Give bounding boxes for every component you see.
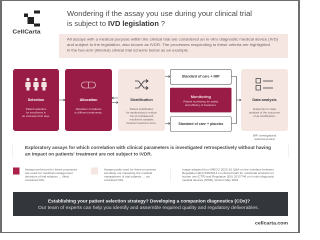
box: standard of care + placebo [170, 116, 231, 132]
box: monitoring: Patient monitoring for safety [183, 99, 219, 103]
source note: Image adapted from MDCG 2022-10 Q&A on the interface between [182, 167, 274, 171]
card: stratification: risk of (im)balanced [130, 114, 154, 118]
card: stratification: Patient stratification [130, 107, 154, 111]
card: allocation: Allocation [80, 98, 98, 102]
box: monitoring [170, 88, 232, 112]
legend: light pink: management of trial subjects → not [104, 174, 150, 178]
box: standard of care + IMP: Standard of care + IMP [182, 74, 220, 78]
connectors to arms [165, 76, 241, 124]
icon: patients [25, 78, 47, 90]
call to action banner: Our team of experts can help you identify and assemble required quality and regulatory deliverables. [38, 205, 259, 210]
icon: capsule [82, 82, 96, 88]
exploratory assays statement: Exploratory assays for which correlation with clinical parameters is investigated retrospectively without having [25, 145, 271, 150]
source note: human use (CTR) and Regulation (EU) 2017/746 on in vitro diagnostic [182, 174, 275, 178]
card: allocation: to different treatments. [75, 111, 103, 115]
card: data analysis: analysis of the outcomes [249, 110, 280, 114]
intro panel: All assays with a medical purpose within the clinical trial are considered an in vitro diagnostic medical device (IVD) [67, 38, 278, 42]
title: is subject to IVD legislation ? [67, 21, 165, 28]
card: selection [13, 69, 59, 131]
arrow: selection to allocation [59, 99, 65, 101]
website: cellcarta.com [255, 220, 288, 226]
call to action banner: Establishing your patient selection strategy? Developing a companion diagnostics (CDx)? [48, 198, 250, 204]
legend: light pink: Assays partly used for these processes [104, 167, 157, 171]
card: stratification: between treatment arms. [127, 121, 157, 125]
icon: checklist [256, 78, 273, 90]
legend: dark red [13, 167, 78, 182]
legend: dark red: are used for medical management [25, 171, 73, 175]
footnote: IMP: IMP: investigational [253, 134, 277, 138]
title [67, 11, 252, 28]
card: stratification [118, 69, 165, 131]
card: stratification: enrollment variables [129, 118, 154, 122]
card: selection: Patient selection [26, 107, 47, 111]
intro panel: in the two-arm (blinded) clinical trial scheme below as an example. [67, 48, 189, 52]
exploratory assays statement [12, 144, 288, 158]
logo: CellCarta: CellCarta [12, 30, 42, 36]
box: monitoring: Monitoring [191, 94, 211, 99]
card: allocation: Allocation of patients [76, 107, 102, 111]
source note [182, 167, 275, 182]
card: data analysis: Endpoints for data [253, 107, 276, 111]
card: selection: for enrollment in [26, 110, 46, 114]
footnote: IMP: medicinal product [254, 137, 275, 141]
source note: Regulation (EU) 536/2014 on clinical trials for medicinal products for [182, 171, 274, 175]
card: stratification: for randomizing to reduce [126, 110, 157, 114]
exploratory assays statement: an impact on patients' treatment are not subject to IVDR. [25, 152, 152, 156]
call to action banner [13, 192, 288, 216]
box: standard of care + placebo: Standard of care + placebo [178, 122, 223, 126]
box: standard of care + IMP [170, 69, 231, 84]
icon: shuffle [135, 80, 148, 90]
card: stratification: Stratification [130, 98, 154, 102]
legend: dark red: decisions of trial subjects → likely [25, 174, 70, 178]
box: monitoring: and efficacy of treatment. [185, 103, 217, 107]
card: allocation [65, 69, 112, 131]
card: data analysis: of as stratification. [253, 114, 276, 118]
title: Wondering if the assay you use during your clinical trial [67, 11, 252, 18]
legend: dark red: considered IVDs. [25, 178, 45, 182]
intro panel [59, 34, 288, 58]
card: data analysis: Data analysis [252, 98, 277, 102]
legend: dark red: Assays performed for these processes [25, 167, 78, 171]
card: selection: Selection [28, 98, 45, 102]
card: selection: an exclusion-first step. [22, 114, 50, 118]
legend: light pink: are likely not impacting the medical [104, 171, 152, 175]
source note: medical devices (IVDR), Version May 2022. [182, 178, 239, 182]
legend: light pink: considered IVDs. [104, 178, 124, 182]
card: data analysis [241, 69, 288, 131]
intro panel: and subject to the legislation, also known as IVDR. The processes responding to these criteria are highlighted [67, 43, 270, 47]
arrows: allocation to stratification [112, 97, 118, 104]
logo: CellCarta [12, 10, 42, 36]
footnote: IMP [253, 134, 277, 141]
legend: light pink [91, 167, 157, 182]
